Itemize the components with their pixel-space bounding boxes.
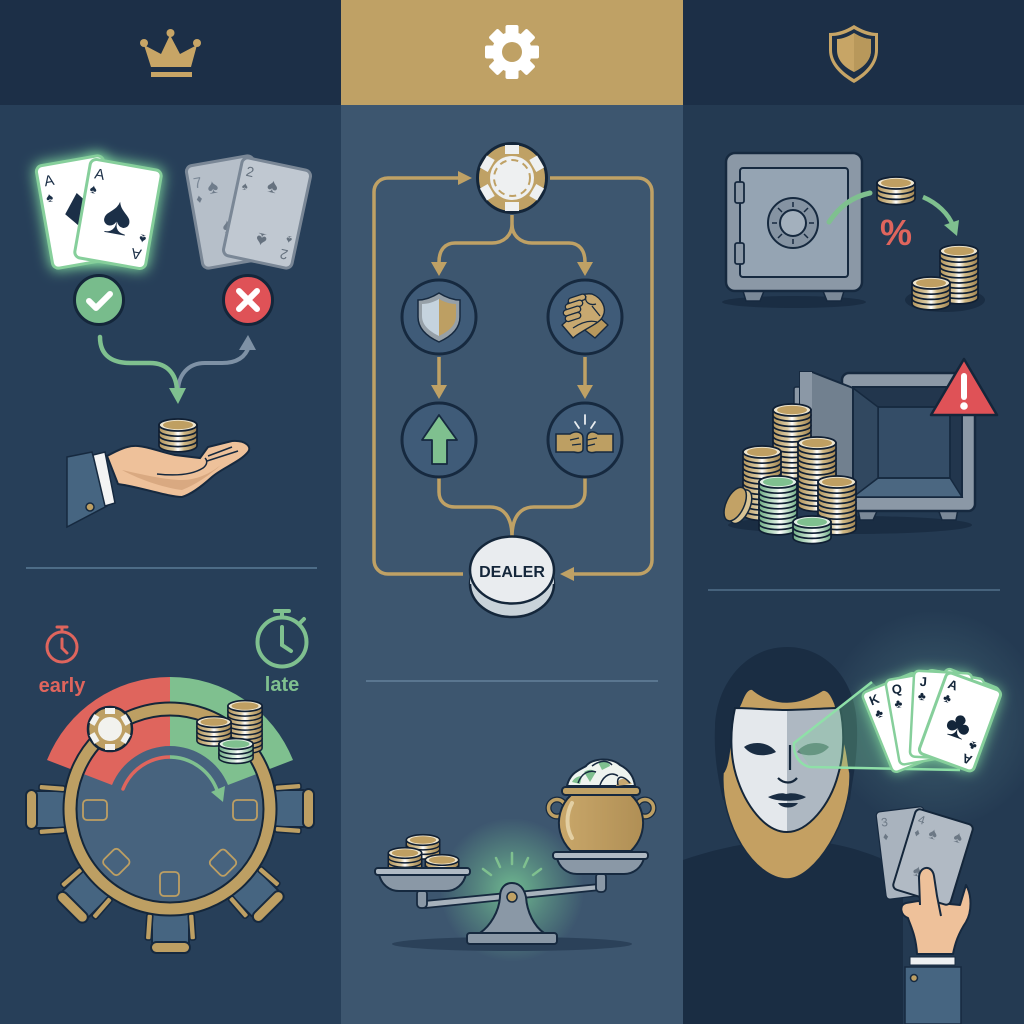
chip stacks xyxy=(719,404,856,544)
hinges xyxy=(735,182,744,264)
inner order arrow xyxy=(123,757,225,802)
left pan xyxy=(375,868,470,891)
mask eye: right xyxy=(797,743,829,755)
glowing royal cards: J xyxy=(919,674,927,689)
left coin stacks xyxy=(388,835,459,879)
table ring xyxy=(70,709,270,909)
label: late: late xyxy=(265,674,299,696)
warning triangle xyxy=(931,359,997,415)
panel: open safe with large stacks xyxy=(719,359,997,544)
background glow xyxy=(825,610,1024,830)
icon: gear xyxy=(485,25,539,79)
icon: crown xyxy=(140,29,201,77)
coin piles xyxy=(912,245,978,310)
panel: betting flow diagram xyxy=(374,144,652,617)
base xyxy=(467,933,557,944)
early arc xyxy=(47,677,170,785)
dealer button xyxy=(470,536,554,617)
weak cards: 2 xyxy=(245,163,256,180)
panel: starting hands selection xyxy=(33,153,312,527)
strong cards with glow: A xyxy=(43,172,56,190)
dealer button: DEALER xyxy=(479,564,545,581)
divider: right top xyxy=(708,589,1000,591)
glowing royal cards: ♣ xyxy=(918,689,926,703)
chairs xyxy=(26,783,314,953)
glowing royal cards xyxy=(861,668,1002,773)
late arc xyxy=(170,677,293,785)
weak cards: 2 xyxy=(278,246,289,263)
seat markers xyxy=(83,800,257,896)
weak cards in hand: ♠ xyxy=(926,825,940,844)
glowing royal cards: ♣ xyxy=(893,696,903,711)
panel: middle column background xyxy=(341,0,683,1024)
weak cards in hand: ♦ xyxy=(913,827,922,840)
strong cards with glow: A xyxy=(93,165,106,184)
icon: hand holding coins xyxy=(67,419,249,527)
header band: right xyxy=(683,0,1024,105)
panel: rake safe xyxy=(722,153,985,312)
safe frame xyxy=(842,373,975,511)
weak cards in hand: ♠ xyxy=(911,862,924,881)
door open xyxy=(794,372,878,510)
left support xyxy=(417,890,427,908)
see-through beam xyxy=(794,682,960,770)
weak cards in hand: ♦ xyxy=(882,831,890,844)
weak cards: ♠ xyxy=(206,175,220,199)
panel: left column background xyxy=(0,0,341,1024)
glowing royal cards: ♣ xyxy=(941,690,954,706)
vertical arrows xyxy=(431,357,593,399)
safe door xyxy=(740,168,848,277)
glowing royal cards: A xyxy=(959,750,974,768)
dial xyxy=(768,198,818,248)
weak cards: ♠ xyxy=(285,233,293,246)
panel: pot odds scale xyxy=(375,759,654,962)
coin pile shadow xyxy=(905,288,985,312)
divider: middle xyxy=(366,680,658,682)
branch arrows from chip xyxy=(431,215,593,276)
green rake arc xyxy=(829,193,870,222)
rake coin xyxy=(877,177,915,205)
icon: shield xyxy=(829,25,878,83)
weak cards xyxy=(185,155,312,269)
glowing royal cards: ♣ xyxy=(940,702,978,750)
chip stacks xyxy=(197,701,262,763)
interior floor xyxy=(853,478,962,497)
weak cards: 7 xyxy=(192,174,203,192)
neck and beard xyxy=(723,689,850,879)
ground shadow xyxy=(728,516,972,534)
beam xyxy=(425,884,600,908)
node: raise arrow xyxy=(402,403,476,477)
node: fist bump xyxy=(548,403,622,477)
table felt xyxy=(70,709,270,909)
pot of chips xyxy=(548,759,654,851)
weak cards: ♦ xyxy=(195,191,204,206)
arrow: to profit xyxy=(100,337,186,404)
percent sign: % xyxy=(880,212,912,253)
weak cards: ♠ xyxy=(221,214,235,238)
outer loop arrows xyxy=(374,178,652,574)
green arrow xyxy=(923,197,959,236)
weak cards: ♠ xyxy=(265,175,280,199)
check badge xyxy=(74,276,124,324)
safe shadow xyxy=(722,296,866,308)
strong cards with glow: ♠ xyxy=(98,184,137,248)
node: top chip xyxy=(478,144,546,212)
hair xyxy=(715,647,857,800)
panel: masked player with hidden strength xyxy=(683,610,1024,1024)
palm holding cards xyxy=(901,885,970,954)
arrowheads: outer loop xyxy=(458,171,574,581)
chip on rail xyxy=(88,707,132,751)
strong cards with glow xyxy=(33,153,164,272)
panel: position at the table xyxy=(26,611,314,953)
glowing royal cards: ♣ xyxy=(873,705,885,721)
pivot xyxy=(507,892,517,902)
node: handshake xyxy=(548,280,622,354)
label: early: early xyxy=(39,675,86,697)
weak cards: ♠ xyxy=(241,180,249,193)
strong cards with glow: ♠ xyxy=(89,181,98,197)
glowing royal cards: K xyxy=(867,691,882,708)
right support xyxy=(596,873,606,892)
safe body xyxy=(726,153,862,291)
glowing royal cards: Q xyxy=(891,681,903,697)
arrow: to fold xyxy=(178,335,256,392)
panel: right column background xyxy=(683,0,1024,1024)
icon: late timer xyxy=(258,611,306,666)
header band: left xyxy=(0,0,341,105)
shirt cuff xyxy=(910,957,955,965)
sleeve xyxy=(905,967,961,1024)
glowing royal cards: ♣ xyxy=(966,738,979,754)
safe interior xyxy=(853,387,962,497)
stand xyxy=(480,883,544,933)
header band: middle xyxy=(341,0,683,105)
weak cards in hand: 4 xyxy=(916,812,927,828)
node: shield xyxy=(402,280,476,354)
cross badge xyxy=(224,276,272,324)
merge lines to dealer xyxy=(439,478,585,537)
interior back xyxy=(878,407,950,478)
weak cards: ♠ xyxy=(254,227,269,251)
right pan xyxy=(553,852,648,874)
icon: early timer xyxy=(47,627,77,662)
mask xyxy=(731,708,843,832)
glow rays xyxy=(483,853,541,875)
weak cards in hand: 3 xyxy=(880,815,889,830)
weak cards: ♠ xyxy=(230,188,245,212)
thumb over cards xyxy=(919,868,941,935)
body xyxy=(683,840,903,1024)
weak cards in hand xyxy=(876,806,974,906)
glowing royal cards: A xyxy=(946,676,961,694)
safe feet xyxy=(743,291,844,301)
weak cards in hand: ♠ xyxy=(951,829,965,847)
mask nose and mouth xyxy=(778,745,797,782)
ground shadow xyxy=(392,937,632,951)
balance glow xyxy=(440,818,584,962)
feet xyxy=(858,509,958,520)
strong cards with glow: A xyxy=(130,244,143,263)
strong cards with glow: ♠ xyxy=(45,189,54,205)
mask eye: left xyxy=(744,743,776,755)
divider: left xyxy=(26,567,317,569)
strong cards with glow: ♠ xyxy=(138,231,147,247)
